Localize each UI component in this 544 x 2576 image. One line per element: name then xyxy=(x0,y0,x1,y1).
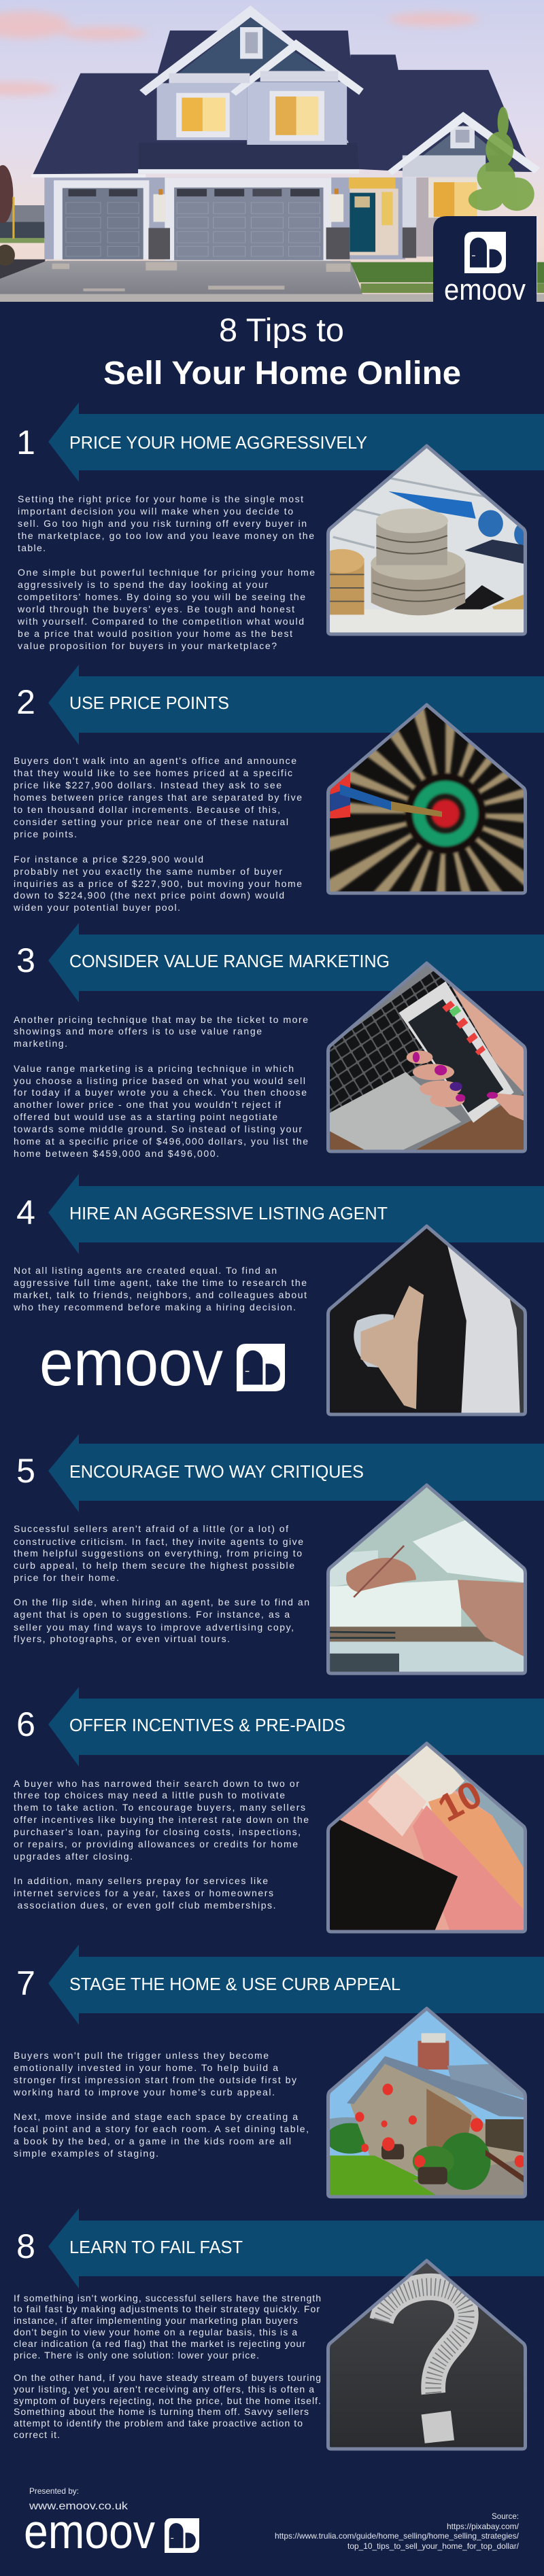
title: Sell Your Home Online xyxy=(103,355,461,391)
heading 4: HIRE AN AGGRESSIVE LISTING AGENT xyxy=(69,1203,388,1223)
body text 1: One simple but powerful technique for pricing your home xyxy=(18,567,315,578)
heading 2: USE PRICE POINTS xyxy=(69,693,229,713)
photo: euro notes and wallet in house frame: 10 xyxy=(431,1772,488,1830)
body text 3 xyxy=(14,1014,308,1159)
body text 6 xyxy=(14,1778,309,1911)
body text 6: purchaser's loan, paying for closing costs, inspections, xyxy=(14,1826,301,1837)
footer: sources xyxy=(275,2511,520,2551)
body text 6: A buyer who has narrowed their search down to two or xyxy=(14,1778,299,1789)
body text 6: In addition, many sellers prepay for services like xyxy=(14,1875,268,1886)
body text 7: focal point and a story for each room. A set dining table, xyxy=(14,2123,309,2134)
body text 4: Not all listing agents are created equal. To find an xyxy=(14,1265,277,1276)
body text 8: correct it. xyxy=(14,2429,60,2440)
icon: emoov door xyxy=(464,232,506,273)
body text 2: that they would like to see homes priced at a specific xyxy=(14,767,292,778)
hero photo: house at dusk xyxy=(0,0,544,302)
body text 1: world through the buyers' eyes. Be tough and honest xyxy=(17,604,294,614)
body text 7: emotionally invested in your home. To help build a xyxy=(14,2062,278,2073)
body text 3: for today if a buyer wrote you a check. You then choose xyxy=(14,1087,307,1098)
arrow banner 8 xyxy=(48,2208,544,2288)
body text 8: price. There is only one solution: lower your price. xyxy=(14,2350,259,2361)
body text 1: the marketplace, go too low and you leave money on the xyxy=(18,530,314,541)
body text 6: upgrades after closing. xyxy=(14,1851,133,1862)
number 8: 8 xyxy=(16,2227,35,2265)
body text 2: consider setting your price near one of these natural xyxy=(14,816,288,827)
photo: coins and pens in house frame xyxy=(319,444,530,636)
body text 3: towards some middle ground. So instead of listing your xyxy=(14,1124,302,1134)
photo: chalk question mark in house frame xyxy=(326,2259,527,2451)
body text 7: simple examples of staging. xyxy=(14,2148,158,2159)
body text 8: your listing, yet you aren't receiving any offers, this is often a xyxy=(14,2384,314,2395)
body text 7 xyxy=(13,2050,309,2159)
body text 7: Next, move inside and stage each space by creating a xyxy=(14,2111,298,2122)
body text 1: important decision you will make when you decide to xyxy=(18,506,293,517)
title: 8 Tips to xyxy=(219,313,344,349)
panel: tip 8 xyxy=(14,2208,544,2451)
body text 2: widen your potential buyer pool. xyxy=(13,902,180,913)
body text 3: home at a specific price of $496,000 dollars, you list the xyxy=(14,1136,308,1147)
body text 2: price points. xyxy=(14,829,77,839)
body text 2: price like $227,900 dollars. Instead they ask to see xyxy=(14,780,282,790)
footer: sources: https://www.trulia.com/guide/home_selling/home_selling_strategies/ xyxy=(275,2531,520,2541)
body text 1: with yourself. Compared to the competition what would xyxy=(17,616,304,627)
title xyxy=(103,313,461,391)
body text 2: probably net you exactly the same number of buyer xyxy=(14,866,282,877)
arrow banner 4 xyxy=(48,1174,544,1254)
body text 6: them to take action. To encourage buyers, many sellers xyxy=(14,1802,305,1813)
photo: stone cottage in house frame xyxy=(316,2006,530,2199)
body text 4 xyxy=(13,1265,307,1312)
photo: reviewing documents in house frame xyxy=(326,1483,530,1677)
body text 2: to ten thousand dollar increments. Because of this, xyxy=(14,804,280,815)
body text 1: competitors' homes. By doing so you will be seeing the xyxy=(18,591,305,602)
body text 1: be a price that would position your home as the best xyxy=(18,628,292,639)
body text 2: homes between price ranges that are separated by five xyxy=(14,792,302,803)
photo: dartboard in house frame xyxy=(326,703,527,894)
heading 8: LEARN TO FAIL FAST xyxy=(69,2237,243,2257)
body text 5: price for their home. xyxy=(14,1572,119,1583)
body text 7: a book by the bed, or a game in the kids room are all xyxy=(14,2136,291,2146)
icon: emoov door, small xyxy=(165,2518,199,2553)
heading 7: STAGE THE HOME & USE CURB APPEAL xyxy=(69,1974,401,1994)
body text 7: Buyers won't pull the trigger unless they become xyxy=(14,2050,269,2061)
body text 5: On the flip side, when hiring an agent, be sure to find an xyxy=(14,1597,309,1607)
number 3: 3 xyxy=(16,941,35,979)
panel: tip 1 xyxy=(16,402,544,651)
body text 2: For instance a price $229,900 would xyxy=(14,854,203,865)
number 5: 5 xyxy=(16,1452,35,1490)
body text 5: agent that is open to suggestions. For instance, as a xyxy=(14,1609,290,1620)
body text 6: offer incentives like buying the interest rate down on the xyxy=(14,1814,309,1825)
body text 8: instance, if after implementing your marketing plan buyers xyxy=(14,2315,298,2326)
footer: sources: https://pixabay.com/ xyxy=(447,2522,520,2531)
body text 6: three top choices may need a little push to motivate xyxy=(14,1790,285,1800)
body text 6: internet services for a year, taxes or homeowners xyxy=(14,1887,273,1898)
footer: sources: top_10_tips_to_sell_your_home_for_top_dollar/ xyxy=(347,2541,520,2551)
arrow banner 3 xyxy=(48,923,544,1003)
number 6: 6 xyxy=(16,1705,35,1743)
photo: handshake in house frame xyxy=(326,1224,530,1416)
footer: presented by: www.emoov.co.uk xyxy=(29,2501,129,2512)
panel: tip 2 xyxy=(13,665,544,916)
body text 5: seller you may find ways to improve advertising copy, xyxy=(14,1622,294,1633)
body text 7: working hard to improve your home's curb appeal. xyxy=(13,2087,275,2098)
body text 5: them helpful suggestions on everything, from pricing to xyxy=(14,1548,302,1559)
panel: tip 6 xyxy=(14,1687,544,1934)
body text 5: Successful sellers aren't afraid of a little (or a lot) of xyxy=(14,1523,288,1534)
photo: euro notes and wallet in house frame xyxy=(326,1741,530,1934)
body text 8: attempt to identify the problem and take proactive action to xyxy=(14,2418,303,2429)
photo: phone and laptop in house frame xyxy=(326,961,527,1155)
heading 1: PRICE YOUR HOME AGGRESSIVELY xyxy=(69,432,367,453)
body text 1: aggressively is to spend the day looking at your xyxy=(18,579,268,590)
body text 6: or repairs, or providing allowances or credits for home xyxy=(14,1839,298,1849)
body text 3: Another pricing technique that may be the ticket to more xyxy=(14,1014,308,1025)
body text 5: flyers, photographs, or even virtual tours. xyxy=(14,1633,230,1644)
body text 3: you choose a listing price based on what you would sell xyxy=(14,1075,305,1086)
arrow banner 1 xyxy=(48,402,544,482)
body text 1: Setting the right price for your home is the single most xyxy=(18,493,303,504)
body text 4: aggressive full time agent, take the time to research the xyxy=(14,1277,307,1288)
body text 3: another lower price - one that you wouldn't reject if xyxy=(14,1099,281,1110)
panel: tip 5 xyxy=(14,1434,544,1677)
body text 2: Buyers don't walk into an agent's office and announce xyxy=(14,755,296,766)
panel: tip 3 xyxy=(14,923,544,1159)
number 4: 4 xyxy=(16,1194,35,1232)
body text 8: clear indication (a red flag) that the market is rejecting your xyxy=(14,2338,305,2349)
logo badge: emoov xyxy=(433,216,537,307)
body text 8: to fail fast by making adjustments to their strategy quickly. For xyxy=(14,2303,320,2314)
body text 1: table. xyxy=(18,542,46,553)
heading 6: OFFER INCENTIVES & PRE-PAIDS xyxy=(69,1715,345,1735)
body text 1 xyxy=(17,493,315,651)
number 7: 7 xyxy=(16,1964,35,2002)
body text 3: showings and more offers is to use value range xyxy=(14,1026,262,1037)
body text 4: market, talk to friends, neighbors, and colleagues about xyxy=(14,1289,307,1300)
body text 5: constructive criticism. In fact, they invite agents to give xyxy=(14,1536,303,1547)
footer: presented by: Presented by: xyxy=(29,2486,79,2496)
heading 5: ENCOURAGE TWO WAY CRITIQUES xyxy=(69,1461,364,1482)
body text 5: curb appeal, to help them secure the highest possible xyxy=(14,1560,294,1571)
body text 2: inquiries as a price of $227,900, but moving your home xyxy=(14,878,302,889)
number 1: 1 xyxy=(16,423,35,462)
logo badge: emoov: emoov xyxy=(444,273,526,307)
body text 3: marketing. xyxy=(14,1038,67,1049)
footer: presented by xyxy=(29,2486,129,2512)
heading 3: CONSIDER VALUE RANGE MARKETING xyxy=(69,951,390,971)
icon: emoov door, large xyxy=(237,1344,285,1391)
body text 2 xyxy=(13,755,302,913)
arrow banner 5 xyxy=(48,1434,544,1512)
panel: tip 4 xyxy=(13,1174,544,1416)
body text 8: don't begin to view your home on a regular basis, this is a xyxy=(14,2327,297,2337)
panel: tip 7 xyxy=(13,1945,544,2199)
body text 8 xyxy=(14,2293,321,2440)
body text 8: If something isn't working, successful sellers have the strength xyxy=(14,2293,321,2303)
body text 8: On the other hand, if you have steady stream of buyers touring xyxy=(14,2372,321,2383)
body text 6: association dues, or even golf club memberships. xyxy=(18,1900,276,1911)
body text 5 xyxy=(14,1523,309,1644)
body text 1: value proposition for buyers in your marketplace? xyxy=(18,640,277,651)
body text 3: Value range marketing is a pricing technique in which xyxy=(14,1063,294,1074)
body text 3: home between $459,000 and $496,000. xyxy=(14,1148,219,1159)
arrow banner 6 xyxy=(48,1687,544,1766)
body text 7: stronger first impression start from the outside first by xyxy=(14,2074,296,2085)
footer logo: emoov: emoov xyxy=(24,2505,155,2559)
arrow banner 7 xyxy=(48,1945,544,2025)
body text 8: Something about the home is turning them off. Savvy sellers xyxy=(14,2406,309,2417)
body text 4: who they recommend before making a hiring decision. xyxy=(13,1302,296,1312)
number 2: 2 xyxy=(16,683,35,721)
body text 3: offered but would use as a starting point negotiate xyxy=(14,1111,277,1122)
body text 1: sell. Go too high and you risk turning off every buyer in xyxy=(18,518,307,529)
body text 8: symptom of buyers rejecting, not the price, but the home itself. xyxy=(14,2395,321,2406)
body text 2: down to $224,900 (the next price point down) would xyxy=(14,890,284,901)
logo: emoov wordmark and icon: emoov xyxy=(39,1327,223,1399)
footer: sources: Source: xyxy=(492,2511,519,2521)
arrow banner 2 xyxy=(48,665,544,745)
